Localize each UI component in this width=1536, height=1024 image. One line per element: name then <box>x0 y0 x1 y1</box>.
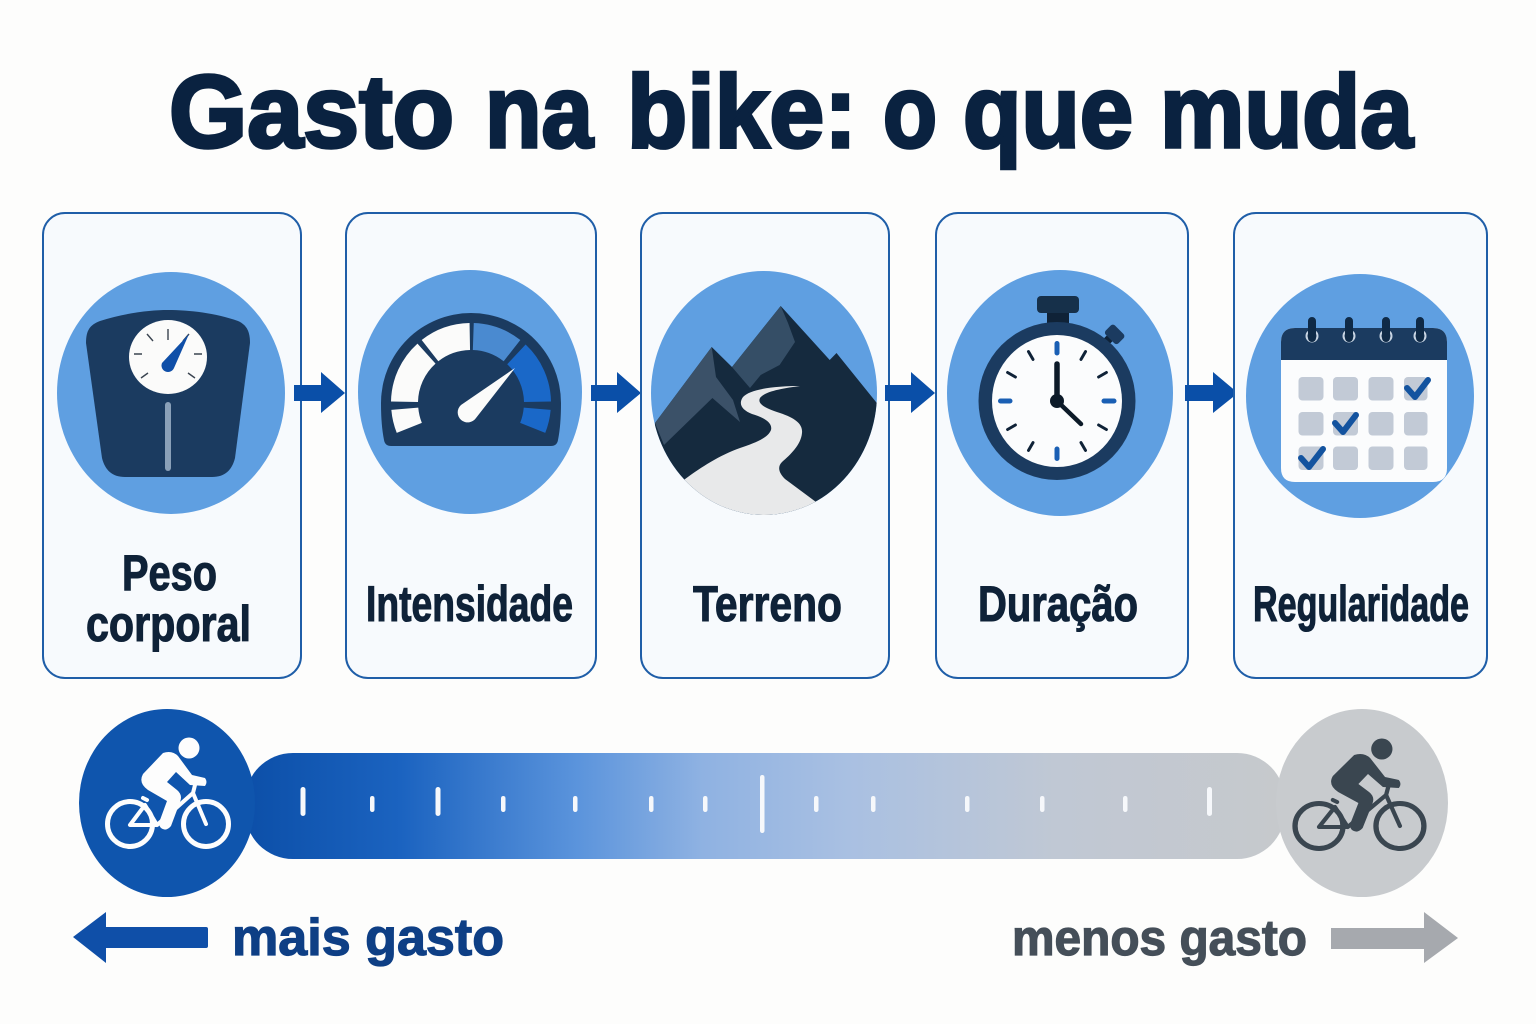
label: peso corporal <box>86 545 251 652</box>
panel: duracao <box>936 213 1188 678</box>
gradient scale bar <box>245 753 1285 859</box>
title: Gasto <box>169 54 454 169</box>
arrow 2 <box>591 372 641 413</box>
title: que <box>963 54 1133 169</box>
icon: bathroom scale <box>57 272 285 514</box>
label: menos gasto: menos gasto <box>1012 910 1307 966</box>
icon: speedometer <box>358 270 582 514</box>
title <box>169 54 1414 169</box>
label: terreno: Terreno <box>693 576 842 632</box>
icon: calendar <box>1246 274 1474 518</box>
arrow 1 <box>294 372 345 413</box>
label: peso corporal: corporal <box>86 596 251 652</box>
panel: regularidade <box>1234 213 1487 678</box>
panel: terreno <box>641 213 889 678</box>
title: na <box>485 54 594 169</box>
label: mais gasto: mais gasto <box>232 909 504 967</box>
title: muda <box>1160 54 1414 169</box>
icon: stopwatch <box>947 270 1173 516</box>
label: intensidade: Intensidade <box>366 576 573 632</box>
panel: intensidade <box>346 213 596 678</box>
icon: mountains with road <box>650 271 880 530</box>
panel: peso corporal <box>43 213 301 678</box>
arrow: mais gasto <box>73 912 208 963</box>
icon: grey cyclist <box>1276 709 1448 897</box>
arrow 3 <box>885 372 935 413</box>
title: bike: <box>627 54 857 169</box>
label: duracao: Duração <box>978 576 1138 632</box>
title: o <box>883 54 937 169</box>
icon: blue cyclist <box>79 709 255 897</box>
arrow 4 <box>1185 372 1238 413</box>
arrow: menos gasto <box>1331 912 1458 963</box>
label: peso corporal: Peso <box>122 545 217 601</box>
